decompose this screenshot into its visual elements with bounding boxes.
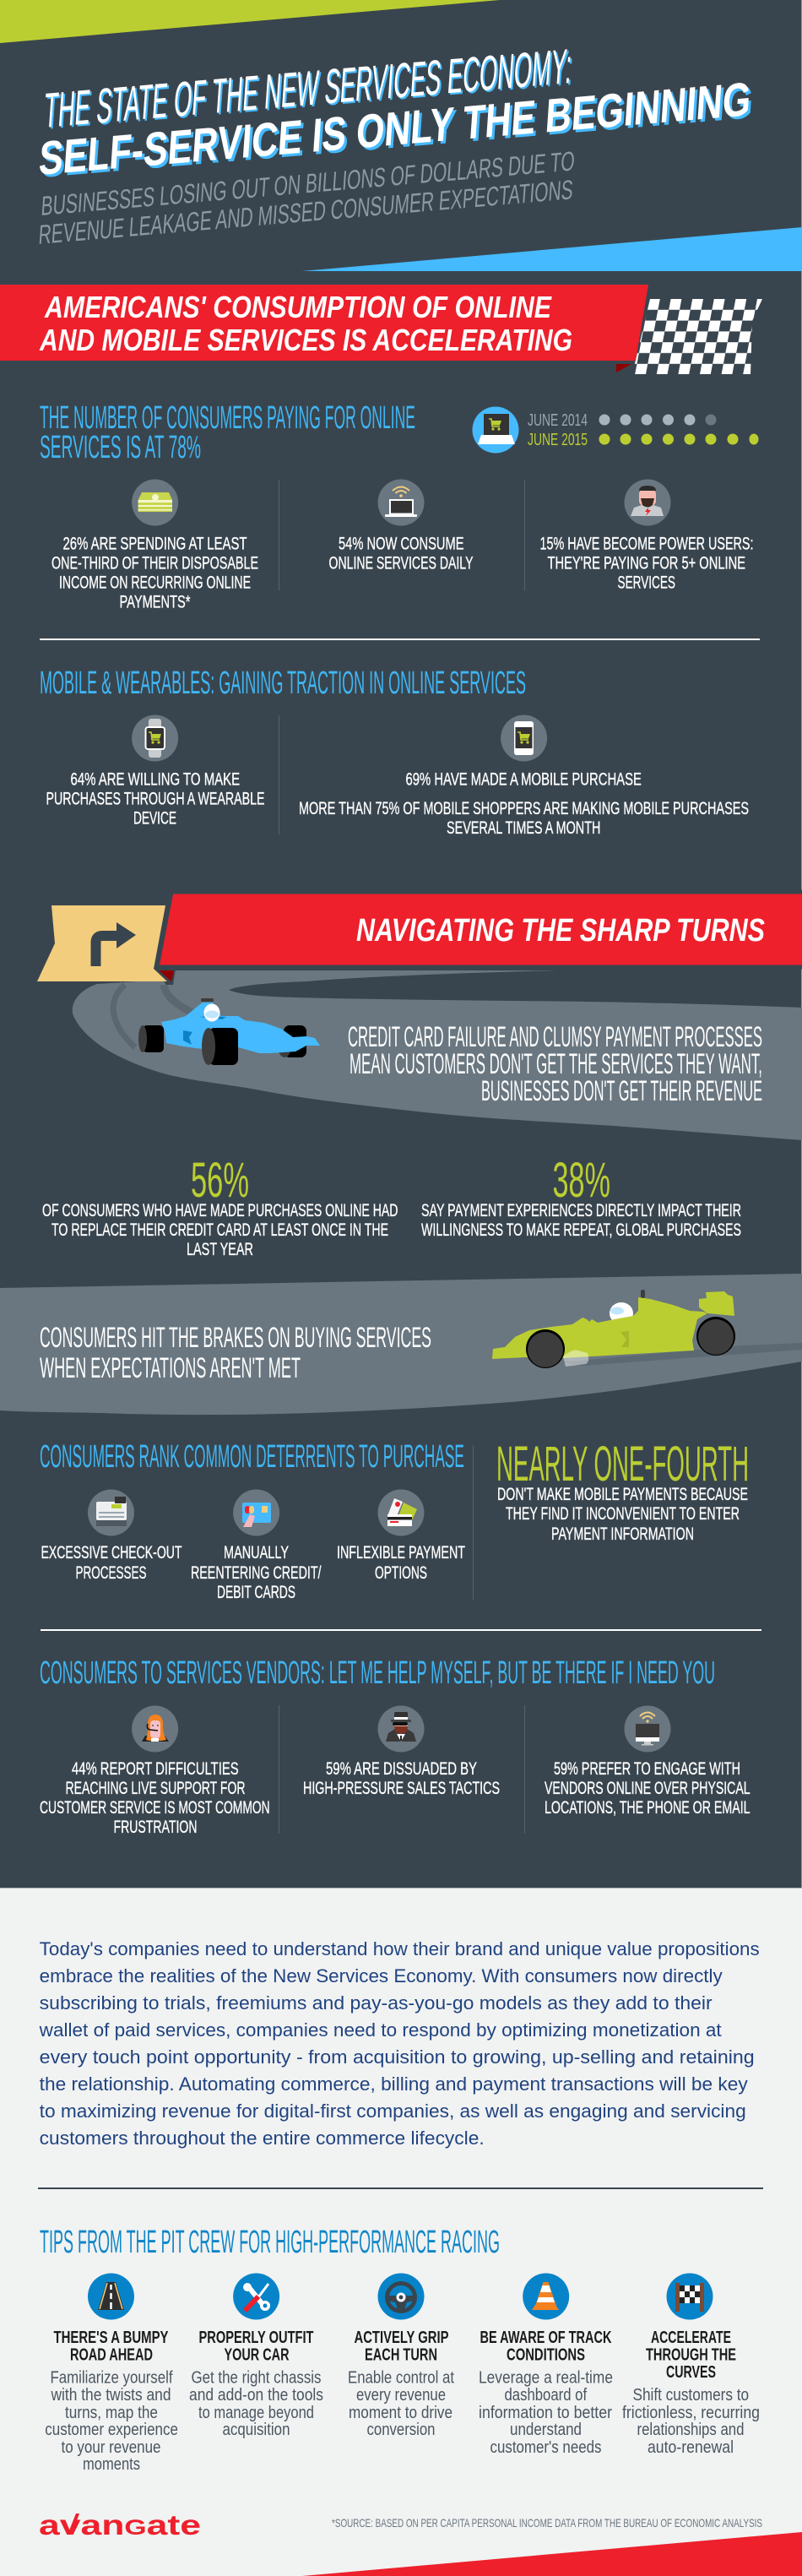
text block: DEBIT CARDS — [217, 1583, 295, 1602]
text block: with the twists and — [51, 2386, 171, 2405]
stat: 69% mobile — [299, 715, 749, 838]
stat: 56% — [42, 1153, 398, 1259]
text block: BE AWARE OF TRACK — [480, 2329, 612, 2347]
road curve with blue car — [73, 970, 802, 1140]
stat: 54% daily — [329, 480, 473, 573]
text block: auto-renewal — [648, 2438, 734, 2457]
text block: relationships and — [637, 2421, 745, 2439]
icon: wrench and screwdriver — [233, 2274, 279, 2319]
section banner: navigating the sharp turns — [37, 892, 802, 985]
text block: SEVERAL TIMES A MONTH — [447, 818, 600, 838]
text block: understand — [510, 2421, 582, 2439]
text block: Enable control at — [348, 2369, 454, 2388]
text block: MANUALLY — [224, 1543, 289, 1562]
text block: HIGH-PRESSURE SALES TACTICS — [303, 1779, 500, 1798]
text block: PROCESSES — [76, 1563, 147, 1583]
tip: accelerate through curves — [622, 2274, 760, 2457]
banner heading — [39, 290, 572, 357]
text block: INFLEXIBLE PAYMENT — [337, 1543, 465, 1562]
text block: EXCESSIVE CHECK-OUT — [41, 1543, 182, 1562]
text: credit card failure — [348, 1021, 762, 1107]
paragraph: the relationship. Automating commerce, billing and payment transactions will be key — [40, 2073, 748, 2095]
text block: Familiarize yourself — [51, 2369, 173, 2388]
text block — [337, 1543, 465, 1583]
text block: ONLINE SERVICES DAILY — [329, 554, 473, 573]
icon: yellow turn sign — [37, 905, 176, 985]
text block: moments — [83, 2455, 140, 2474]
tip: bumpy road — [45, 2274, 178, 2474]
icon: desktop with wifi — [625, 1706, 670, 1752]
text block — [40, 1759, 270, 1837]
text block — [622, 2329, 760, 2457]
deterrent: inflexible options — [337, 1490, 465, 1583]
icon: smartwatch — [132, 715, 178, 762]
text block: customer experience — [45, 2421, 178, 2439]
text block — [51, 534, 258, 611]
tip: outfit your car — [189, 2274, 323, 2439]
legend row: June 2014 — [528, 411, 716, 430]
tip: grip each turn — [348, 2274, 454, 2439]
paragraph — [39, 1938, 760, 2149]
text block: moment to drive — [349, 2404, 452, 2422]
icon: steering wheel — [378, 2274, 424, 2319]
stat: 56%: 56% — [191, 1153, 249, 1208]
icon: road — [88, 2274, 134, 2319]
paragraph: to maximizing revenue for digital-first companies, as well as engaging and servicing — [40, 2100, 746, 2122]
text block: THERE'S A BUMPY — [54, 2329, 169, 2347]
text block — [479, 2329, 613, 2457]
text block — [329, 534, 473, 573]
icon: spy salesman — [378, 1706, 424, 1752]
stat: 59% dissuaded — [303, 1706, 500, 1798]
text block: conversion — [366, 2421, 436, 2439]
paragraph: customers throughout the entire commerce lifecycle. — [40, 2128, 485, 2149]
deterrent: check-out — [41, 1490, 182, 1583]
text block: every revenue — [356, 2386, 446, 2405]
text block: OPTIONS — [375, 1563, 427, 1583]
text block: CUSTOMER SERVICE IS MOST COMMON — [40, 1798, 270, 1818]
text block — [299, 770, 749, 838]
stat: 26% spending — [51, 480, 258, 611]
text block — [545, 1759, 751, 1818]
legend row: June 2015 — [528, 431, 758, 449]
callout: nearly one-fourth — [496, 1437, 749, 1544]
icon: checkered finish flag — [667, 2274, 713, 2319]
text block — [303, 1759, 500, 1798]
heading: consumers paying: SERVICES IS AT 78% — [40, 430, 201, 465]
stat: 38%: 38% — [552, 1153, 610, 1208]
icon: laptop with cart — [473, 407, 518, 453]
text block — [189, 2329, 323, 2439]
text block: ACTIVELY GRIP — [355, 2329, 449, 2347]
text block: frictionless, recurring — [622, 2404, 760, 2422]
text block — [45, 2329, 178, 2474]
stat: 15% power users — [540, 480, 753, 593]
icon: blue race car — [138, 998, 320, 1065]
text block: PURCHASES THROUGH A WEARABLE — [46, 789, 265, 809]
text block: ONE-THIRD OF THEIR DISPOSABLE — [51, 554, 258, 573]
text block: SERVICES — [618, 573, 675, 593]
tip: track conditions — [479, 2274, 613, 2457]
text block: and add-on the tools — [189, 2386, 323, 2405]
text block — [540, 534, 753, 593]
text block: CONDITIONS — [507, 2346, 585, 2365]
text: consumers hit the brakes: WHEN EXPECTATIONS AREN'T MET — [40, 1352, 301, 1384]
text block: REENTERING CREDIT/ — [191, 1563, 322, 1583]
section banner: accelerating — [0, 285, 762, 374]
icon: credit card with finger — [233, 1490, 279, 1535]
icon: smartphone — [501, 715, 547, 762]
paragraph: wallet of paid services, companies need to respond by optimizing monetization at — [39, 2019, 722, 2041]
accent: red wedge — [302, 2532, 802, 2576]
text block: 59% ARE DISSUADED BY — [326, 1759, 477, 1779]
text block: 69% HAVE MADE A MOBILE PURCHASE — [405, 770, 642, 789]
text block: 44% REPORT DIFFICULTIES — [72, 1759, 239, 1779]
text block: EACH TURN — [365, 2346, 437, 2365]
stat: 38% — [421, 1153, 741, 1240]
text block — [191, 1543, 322, 1602]
stat: 56%: LAST YEAR — [187, 1240, 253, 1259]
paragraph: subscribing to trials, freemiums and pay-as-you-go models as they add to their — [40, 1992, 713, 2014]
paragraph: Today's companies need to understand how their brand and unique value propositions — [40, 1938, 760, 1959]
logo: avangate: avan Gate — [39, 2509, 201, 2541]
stat: 56%: OF CONSUMERS WHO HAVE MADE PURCHASES ONLINE HAD — [42, 1201, 398, 1220]
text block: Shift customers to — [633, 2386, 749, 2405]
banner heading: AND MOBILE SERVICES IS ACCELERATING — [39, 323, 572, 357]
text block — [46, 770, 265, 828]
icon: cash register — [88, 1490, 134, 1535]
text: consumers hit the brakes: CONSUMERS HIT THE BRAKES ON BUYING SERVICES — [40, 1322, 431, 1354]
text block: DEVICE — [133, 809, 176, 828]
legend row: June 2014: JUNE 2014 — [528, 411, 588, 430]
text block: to your revenue — [61, 2438, 160, 2457]
text block: dashboard of — [505, 2386, 587, 2405]
banner heading: AMERICANS' CONSUMPTION OF ONLINE — [44, 290, 552, 324]
road band with green car — [0, 1274, 802, 1415]
icon: support agent — [132, 1706, 178, 1752]
legend row: June 2015: JUNE 2015 — [528, 431, 588, 449]
text block: REACHING LIVE SUPPORT FOR — [66, 1779, 245, 1798]
subtitle — [38, 145, 576, 250]
text block: ROAD AHEAD — [70, 2346, 153, 2365]
text block: acquisition — [223, 2421, 290, 2439]
text block: to manage beyond — [198, 2404, 314, 2422]
paragraph: embrace the realities of the New Services Economy. With consumers now directly — [40, 1965, 723, 1986]
text: consumers hit the brakes — [40, 1322, 431, 1384]
text block: ACCELERATE — [651, 2329, 731, 2347]
text block: customer's needs — [490, 2438, 601, 2457]
icon: checkered flag — [632, 299, 762, 374]
icon: traffic cone — [523, 2274, 569, 2319]
text block: 26% ARE SPENDING AT LEAST — [62, 534, 247, 554]
text block: CURVES — [666, 2363, 716, 2382]
text block: PAYMENTS* — [120, 593, 191, 611]
text block: Get the right chassis — [191, 2369, 321, 2388]
paragraph: every touch point opportunity - from acquisition to growing, up-selling and retaining — [40, 2046, 755, 2068]
icon: money stack — [132, 480, 178, 525]
icon: green race car — [492, 1290, 802, 1368]
text block: THROUGH THE — [646, 2346, 736, 2365]
stat: 44% support — [40, 1706, 270, 1837]
text block: YOUR CAR — [225, 2346, 290, 2365]
text block — [348, 2329, 454, 2439]
text block: FRUSTRATION — [113, 1818, 198, 1837]
legend: June 2014 vs June 2015 — [473, 407, 758, 453]
text block: PROPERLY OUTFIT — [199, 2329, 314, 2347]
text block — [41, 1543, 182, 1583]
text block: information to better — [479, 2404, 612, 2422]
heading: consumers paying — [40, 400, 415, 465]
text block: Leverage a real-time — [479, 2369, 613, 2388]
text block: 54% NOW CONSUME — [339, 534, 464, 554]
stat: 59% online — [545, 1706, 751, 1818]
stat: 64% wearable — [46, 715, 265, 828]
text block: INCOME ON RECURRING ONLINE — [59, 573, 251, 593]
decorative corner: green wedge — [0, 0, 500, 43]
icon: payment cards — [378, 1490, 424, 1535]
icon: wifi laptop — [378, 480, 424, 525]
callout: nearly one-fourth: PAYMENT INFORMATION — [551, 1524, 694, 1544]
text block: 64% ARE WILLING TO MAKE — [71, 770, 240, 789]
icon: bearded man — [625, 480, 670, 525]
accent: blue wedge — [302, 227, 802, 271]
text block: turns, map the — [65, 2404, 158, 2422]
stat: 56%: TO REPLACE THEIR CREDIT CARD AT LEAST ONCE IN THE — [51, 1220, 388, 1240]
deterrent: re-entering cards — [191, 1490, 322, 1602]
